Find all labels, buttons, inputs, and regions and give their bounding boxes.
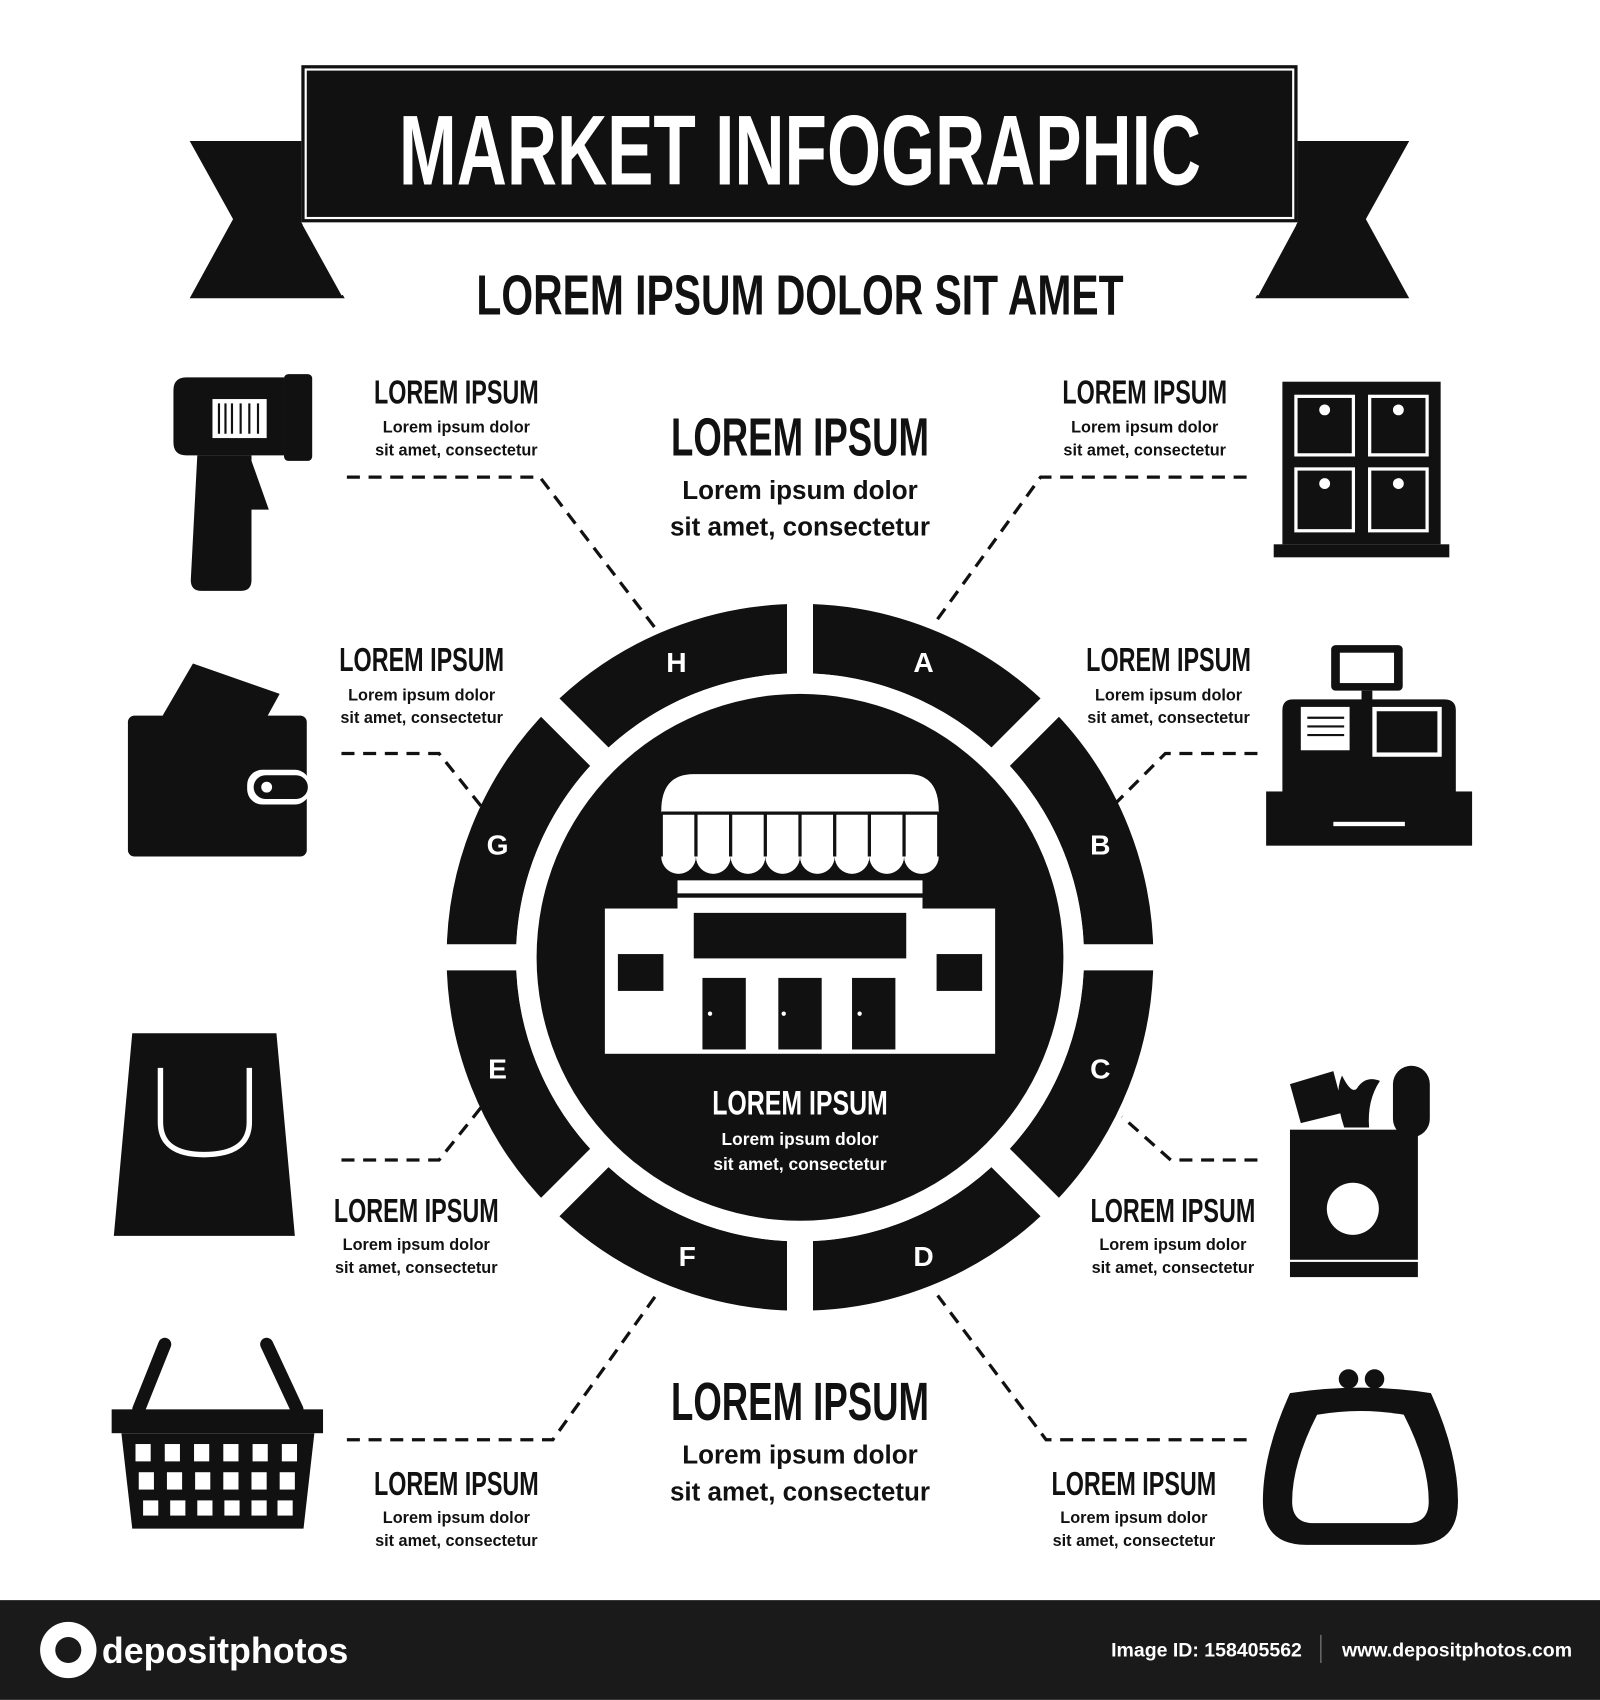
icon: grocery bag bbox=[1290, 1066, 1430, 1277]
footer bar: Image ID: 158405562 bbox=[1111, 1640, 1302, 1662]
ring diagram: sit amet, consectetur bbox=[713, 1154, 887, 1174]
text blocks: sides: sit amet, consectetur bbox=[375, 1532, 538, 1550]
icon: cash register bbox=[1266, 645, 1472, 846]
icon: store bbox=[605, 774, 995, 1054]
text block: bottom center bbox=[670, 1372, 930, 1506]
icon: purse bbox=[1263, 1369, 1458, 1545]
text blocks: sides: LOREM IPSUM bbox=[1086, 642, 1251, 679]
ring diagram: E bbox=[488, 1053, 507, 1085]
ring diagram bbox=[428, 586, 1172, 1329]
text block: bottom center: Lorem ipsum dolor bbox=[682, 1440, 918, 1470]
text blocks: sides: Lorem ipsum dolor bbox=[1095, 686, 1243, 704]
subtitle: LOREM IPSUM DOLOR SIT AMET bbox=[476, 263, 1124, 326]
text blocks: sides: Lorem ipsum dolor bbox=[383, 1509, 531, 1527]
text blocks: sides: sit amet, consectetur bbox=[1087, 709, 1251, 727]
text blocks: sides: Lorem ipsum dolor bbox=[348, 686, 496, 704]
text blocks: sides: sit amet, consectetur bbox=[335, 1259, 498, 1277]
dashed connectors bbox=[341, 477, 1257, 1440]
text blocks: sides: sit amet, consectetur bbox=[340, 709, 504, 727]
footer bar bbox=[0, 1600, 1600, 1700]
title banner bbox=[190, 65, 1409, 298]
ring diagram: B bbox=[1090, 828, 1110, 860]
ring diagram: H bbox=[666, 646, 687, 678]
text block: top center: sit amet, consectetur bbox=[670, 512, 930, 542]
ring diagram: C bbox=[1090, 1053, 1110, 1085]
text blocks: sides: Lorem ipsum dolor bbox=[343, 1236, 491, 1254]
text blocks: sides: Lorem ipsum dolor bbox=[383, 419, 531, 437]
text blocks: sides: LOREM IPSUM bbox=[374, 1466, 539, 1503]
text blocks: sides: Lorem ipsum dolor bbox=[1060, 1509, 1208, 1527]
icon: lockers bbox=[1274, 382, 1449, 557]
text blocks: sides: sit amet, consectetur bbox=[1063, 441, 1227, 459]
ring diagram: LOREM IPSUM bbox=[712, 1084, 888, 1122]
text blocks: sides bbox=[334, 374, 1255, 1550]
text block: bottom center: LOREM IPSUM bbox=[671, 1372, 929, 1432]
text blocks: sides: LOREM IPSUM bbox=[334, 1193, 499, 1230]
icon: wallet with card bbox=[128, 664, 310, 857]
icon: basket bbox=[112, 1344, 323, 1529]
footer bar: depositphotos bbox=[102, 1631, 348, 1671]
icon: shopping bag bbox=[114, 1033, 295, 1236]
ring diagram: F bbox=[679, 1240, 696, 1272]
text blocks: sides: LOREM IPSUM bbox=[1051, 1466, 1216, 1503]
ring diagram: A bbox=[913, 646, 934, 678]
ring diagram: G bbox=[487, 828, 509, 860]
text block: top center: LOREM IPSUM bbox=[671, 407, 929, 467]
ring diagram: D bbox=[913, 1240, 934, 1272]
text blocks: sides: sit amet, consectetur bbox=[1053, 1532, 1216, 1550]
title banner: MARKET INFOGRAPHIC bbox=[399, 95, 1201, 206]
text blocks: sides: LOREM IPSUM bbox=[339, 642, 504, 679]
text block: top center: Lorem ipsum dolor bbox=[682, 475, 918, 505]
text block: bottom center: sit amet, consectetur bbox=[670, 1476, 930, 1506]
text blocks: sides: sit amet, consectetur bbox=[375, 441, 538, 459]
text blocks: sides: Lorem ipsum dolor bbox=[1099, 1236, 1247, 1254]
text blocks: sides: LOREM IPSUM bbox=[1091, 1193, 1255, 1230]
text blocks: sides: LOREM IPSUM bbox=[374, 374, 539, 411]
text blocks: sides: sit amet, consectetur bbox=[1092, 1259, 1255, 1277]
footer bar: www.depositphotos.com bbox=[1341, 1640, 1572, 1662]
text block: top center bbox=[670, 407, 930, 542]
ring diagram: Lorem ipsum dolor bbox=[722, 1129, 879, 1149]
text blocks: sides: Lorem ipsum dolor bbox=[1071, 419, 1219, 437]
icon: barcode scanner bbox=[173, 374, 312, 591]
text blocks: sides: LOREM IPSUM bbox=[1062, 374, 1227, 411]
